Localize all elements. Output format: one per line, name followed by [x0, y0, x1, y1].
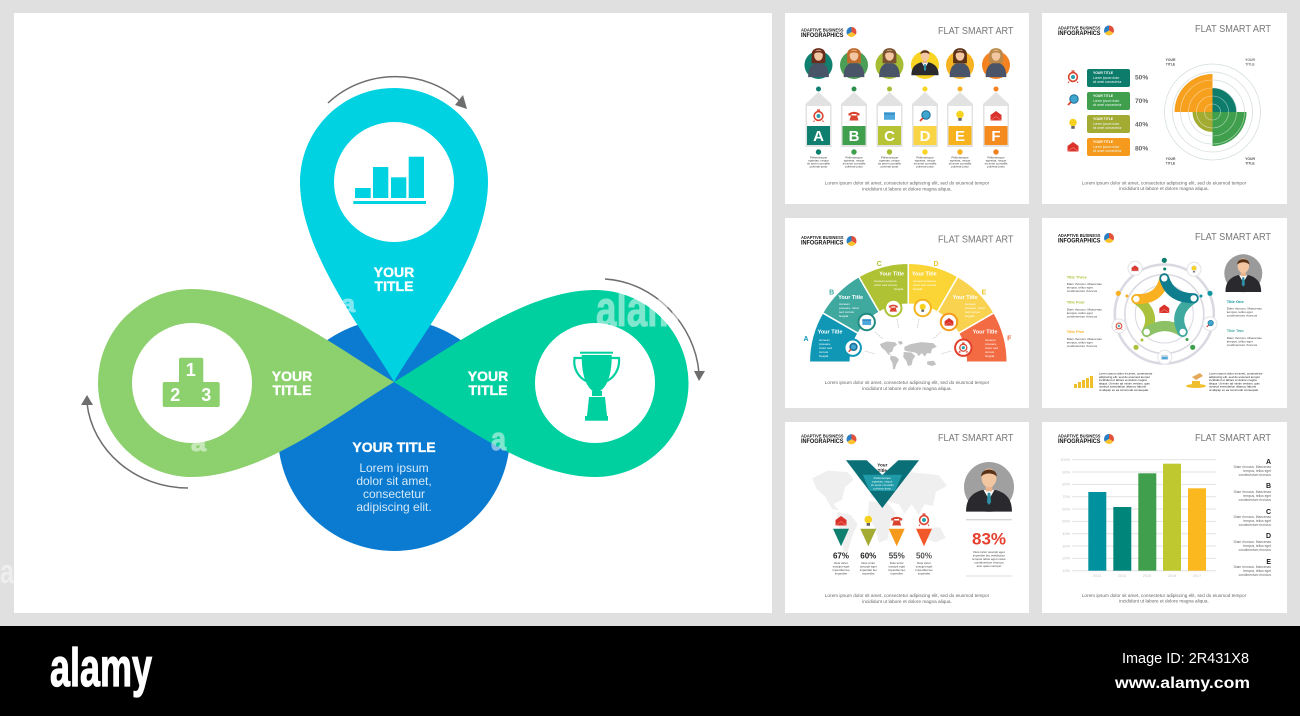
- big V shape: [846, 460, 919, 508]
- bar chart: 2014: [1118, 574, 1126, 578]
- card column B: sit amet convallis: [843, 162, 866, 166]
- logo: [1058, 434, 1114, 445]
- big V shape: pulvinar justo: [873, 486, 891, 490]
- image id: Image ID: 2R431X8: [1122, 650, 1249, 667]
- label: blue body text: Lorem ipsum: [359, 461, 429, 475]
- left labels: condimentum rhoncus: [1067, 314, 1098, 318]
- heading: FLAT SMART ART: [938, 234, 1014, 246]
- left labels: Title Three: [1067, 274, 1088, 280]
- segment body text: posuere, tortor: [965, 306, 985, 310]
- segment body text: [819, 279, 998, 358]
- bottom text right: aliqua. Ut enim ad minim veniam, quis: [1209, 381, 1260, 385]
- bar chart: 90%: [1062, 470, 1071, 474]
- segment body text: tortor sed: [985, 346, 998, 350]
- stat block: sem quam semper: [977, 564, 1001, 568]
- world map: [812, 469, 947, 552]
- bottom text right: ut aliquip ex ea commodo consequat.: [1209, 388, 1259, 392]
- left labels: Title Four: [1067, 300, 1085, 304]
- caption: incididunt ut labore et dolore magna aliqua.: [1119, 186, 1209, 191]
- bottom text left: Lorem ipsum dolor sit amet, consectetur: [1099, 372, 1152, 376]
- polar area chart: TITLE: [1166, 162, 1176, 166]
- bottom text right: adipiscing elit, sed do eiusmod tempor: [1209, 375, 1260, 379]
- side legend: tempus, tellus eget: [1243, 544, 1271, 548]
- bottom text right: Lorem ipsum dolor sit amet, consectetur: [1209, 372, 1262, 376]
- icon badges: [844, 300, 972, 356]
- segment body text: Aenean: [839, 302, 850, 306]
- alamy logo: alamy: [50, 638, 152, 698]
- side legend: Diam rhoncus. Maecenas: [1234, 515, 1271, 519]
- list rows: sit amet consectetur: [1093, 126, 1122, 130]
- logo: [801, 235, 856, 246]
- percentage columns: imperdiet leo: [915, 568, 933, 572]
- side legend: [1234, 459, 1271, 577]
- card column D: D: [920, 128, 931, 145]
- bar chart: 2015: [1143, 574, 1151, 578]
- card column B: [840, 48, 868, 168]
- world map: [880, 341, 937, 369]
- side legend: Diam rhoncus. Maecenas: [1234, 540, 1271, 544]
- bottom text left: nostrud exercitation ullamco laboris: [1099, 385, 1147, 389]
- right labels: condimentum rhoncus: [1227, 343, 1258, 347]
- card column C: Pellentesque: [881, 156, 898, 160]
- logo: INFOGRAPHICS: [1058, 238, 1100, 244]
- segment body text: feugiat: [965, 314, 974, 318]
- big V shape: sit amet convallis: [871, 483, 894, 487]
- big V shape: Your: [877, 462, 887, 468]
- side legend: condimentum rhoncus: [1239, 573, 1271, 577]
- arrow: left: [81, 395, 188, 488]
- portrait: [964, 462, 1014, 512]
- card column D: pulvinar justo: [916, 164, 934, 168]
- label: green title: TITLE: [273, 382, 311, 398]
- arrow: top: [328, 77, 467, 109]
- stat block: 83%: [972, 530, 1006, 548]
- segment letters: C: [877, 261, 882, 268]
- label: blue body text: dolor sit amet,: [356, 474, 432, 488]
- percentage columns: imperdiet leo: [860, 568, 877, 572]
- caption: Lorem ipsum dolor sit amet, consectetur adipiscing elit, sed do eiusmod tempor: [825, 593, 989, 598]
- segment titles: [818, 272, 997, 336]
- card column A: A: [813, 128, 824, 145]
- card column A: [804, 48, 832, 168]
- heading: FLAT SMART ART: [1195, 232, 1271, 243]
- caption: Lorem ipsum dolor sit amet, consectetur adipiscing elit, sed do eiusmod tempor: [825, 380, 989, 385]
- list rows: Lorem ipsum dolor: [1093, 99, 1119, 103]
- watermark fragments: a: [191, 430, 207, 457]
- card column E: Pellentesque: [951, 156, 969, 160]
- card column B: B: [849, 128, 860, 145]
- bar chart: 2013: [1093, 574, 1101, 578]
- caption: incididunt ut labore et dolore magna aliqua.: [862, 186, 952, 192]
- card column D: sit amet convallis: [914, 162, 937, 166]
- caption: Lorem ipsum dolor sit amet, consectetur adipiscing elit, sed do eiusmod tempor: [1082, 593, 1246, 598]
- icon: growth chart: [1074, 376, 1093, 388]
- label: blue body text: adipiscing elit.: [356, 500, 432, 514]
- segment body text: feugiat: [839, 314, 848, 318]
- bar chart: 60%: [1062, 507, 1071, 511]
- arrow: right: [605, 279, 705, 381]
- label: teal title: TITLE: [469, 382, 507, 398]
- segment body text: posuere, tortor: [839, 306, 859, 310]
- list rows: 70%: [1135, 98, 1148, 105]
- percentage columns: suscipit eget: [916, 564, 932, 568]
- card column B: egestas, neque: [844, 158, 865, 162]
- right labels: [1227, 299, 1262, 347]
- left labels: condimentum rhoncus: [1067, 344, 1098, 348]
- segment titles: Your Title: [912, 272, 937, 278]
- side legend: tempus, tellus eget: [1243, 519, 1271, 523]
- logo: INFOGRAPHICS: [1058, 439, 1100, 445]
- bar chart: 20%: [1062, 557, 1071, 561]
- logo: [801, 434, 856, 445]
- right labels: tempus, tellus eget: [1227, 340, 1253, 344]
- label: teal title: YOUR: [468, 368, 508, 384]
- star nodes: [1133, 275, 1197, 335]
- percentage columns: suscipit eget: [860, 564, 877, 568]
- card column D: Pellentesque: [916, 156, 934, 160]
- card column E: egestas, neque: [950, 158, 971, 162]
- label: green title: YOUR: [272, 368, 312, 384]
- blue circle: [278, 319, 510, 551]
- polar area chart: [1164, 58, 1260, 166]
- heading: FLAT SMART ART: [938, 433, 1014, 444]
- card column F: Pellentesque: [987, 156, 1005, 160]
- side legend: Diam rhoncus. Maecenas: [1234, 565, 1271, 569]
- bottom text left: aliqua. Ut enim ad minim veniam, quis: [1099, 381, 1150, 385]
- watermark fragments: alam: [596, 281, 680, 337]
- bar chart: 10%: [1062, 569, 1071, 573]
- bar chart: 2016: [1168, 574, 1176, 578]
- side legend: Diam rhoncus. Maecenas: [1234, 490, 1271, 494]
- segment body text: tortor sed cursus: [913, 283, 936, 287]
- segment body text: feugiat: [985, 354, 994, 358]
- segment letters: E: [982, 290, 987, 296]
- list rows: YOUR TITLE: [1093, 117, 1114, 121]
- segment body text: posuere,: [819, 342, 831, 346]
- segment body text: posuere,: [985, 342, 997, 346]
- big V shape: Title: [878, 468, 887, 473]
- side legend: D: [1266, 533, 1271, 540]
- segment body text: tortor sed: [819, 346, 832, 350]
- segment body text: cursus: [819, 350, 829, 354]
- polar area chart: TITLE: [1166, 62, 1176, 66]
- card column C: C: [884, 128, 895, 145]
- segment titles: Your Title: [838, 295, 863, 301]
- watermark fragments: a: [341, 291, 356, 318]
- left labels: tempus, tellus eget: [1067, 340, 1093, 344]
- side legend: Diam rhoncus. Maecenas: [1234, 465, 1271, 469]
- label: blue body text: consectetur: [363, 487, 425, 501]
- panel: bar chart: [1042, 422, 1287, 613]
- bar chart: 100%: [1060, 458, 1071, 462]
- bar chart: 30%: [1062, 544, 1071, 548]
- polar area chart: TITLE: [1245, 62, 1255, 66]
- segment body text: feugiat: [894, 287, 903, 291]
- stat block: condimentum rhoncus: [974, 560, 1004, 564]
- connector lines: [865, 319, 951, 354]
- bottom text right: incididunt ut labore et dolore magna: [1209, 378, 1257, 382]
- bottom text left: adipiscing elit, sed do eiusmod tempor: [1099, 375, 1150, 379]
- card column A: Pellentesque: [810, 156, 827, 160]
- logo: INFOGRAPHICS: [801, 240, 844, 246]
- segment titles: Your Title: [973, 330, 997, 336]
- list rows: sit amet consectetur: [1093, 149, 1122, 153]
- bottom text left: ut aliquip ex ea commodo consequat.: [1099, 388, 1149, 392]
- card column F: sit amet convallis: [985, 162, 1008, 166]
- bar chart: 2017: [1193, 574, 1201, 578]
- side legend: tempus, tellus eget: [1243, 494, 1271, 498]
- stat block: imperdiet leo vestibulum: [973, 554, 1006, 558]
- card column E: E: [955, 128, 965, 145]
- left labels: Diam rhoncus. Maecenas: [1067, 282, 1102, 286]
- green pin: [98, 289, 394, 477]
- heading: FLAT SMART ART: [1195, 24, 1271, 35]
- segment body text: tortor sed cursus: [874, 283, 897, 287]
- logo: ADAPTIVE BUSINESS: [801, 28, 844, 32]
- side legend: C: [1266, 509, 1271, 516]
- segment body text: Aenean: [819, 338, 830, 342]
- website: www.alamy.com: [1114, 675, 1250, 692]
- percentage columns: imperdiet leo: [888, 568, 906, 572]
- segment letters: D: [933, 261, 939, 268]
- icon: podium: 3: [201, 385, 211, 405]
- segment titles: Your Title: [818, 330, 842, 336]
- caption: incididunt ut labore et dolore magna aliqua.: [862, 599, 952, 604]
- list rows: sit amet consectetur: [1093, 103, 1122, 107]
- segment letters: A: [803, 336, 809, 343]
- bar chart: [1060, 458, 1216, 578]
- bottom text left: incididunt ut labore et dolore magna: [1099, 378, 1147, 382]
- side legend: condimentum rhoncus: [1239, 498, 1271, 502]
- caption: incididunt ut labore et dolore magna aliqua.: [1119, 598, 1209, 604]
- segment letters: F: [1007, 336, 1012, 342]
- card column C: pulvinar justo: [881, 164, 899, 168]
- heading: FLAT SMART ART: [1195, 433, 1271, 444]
- list rows: 40%: [1135, 122, 1148, 128]
- left labels: condimentum rhoncus: [1067, 289, 1098, 293]
- side legend: E: [1266, 559, 1271, 566]
- side legend: condimentum rhoncus: [1239, 473, 1271, 477]
- watermark fragment: margin: a: [0, 553, 15, 591]
- logo: INFOGRAPHICS: [801, 33, 844, 39]
- polar area chart: YOUR: [1166, 157, 1175, 161]
- icon: trophy: [574, 352, 619, 421]
- percentage columns: 67%: [833, 552, 849, 560]
- card column A: egestas, neque: [808, 158, 829, 162]
- percentage columns: 60%: [860, 552, 876, 560]
- right labels: tempus, tellus eget: [1227, 310, 1253, 314]
- card column A: pulvinar justo: [810, 164, 828, 168]
- center icon: [1159, 304, 1169, 313]
- stat block: tempus tellus eget metus: [972, 557, 1006, 561]
- percentage columns: suscipit eget: [888, 564, 905, 568]
- card column F: pulvinar justo: [987, 164, 1005, 168]
- segment body text: Aenean posuere,: [913, 279, 937, 283]
- card column A: sit amet convallis: [807, 162, 830, 166]
- panel: polar chart: [1042, 13, 1287, 204]
- card column C: sit amet convallis: [878, 162, 901, 166]
- right labels: Diam rhoncus. Maecenas: [1227, 336, 1262, 340]
- stat block: Duis tortor suscipit eget: [973, 550, 1005, 554]
- panel: star cycle: [1042, 218, 1287, 408]
- logo: ADAPTIVE BUSINESS: [801, 235, 844, 240]
- segment titles: Your Title: [879, 272, 904, 278]
- icon: bar chart: [353, 157, 426, 204]
- list rows: YOUR TITLE: [1093, 140, 1114, 144]
- card column F: F: [991, 128, 1001, 145]
- panel: map and percentages: [785, 422, 1029, 613]
- left labels: [1067, 274, 1102, 348]
- percentage columns: [832, 513, 933, 576]
- card column E: pulvinar justo: [951, 164, 969, 168]
- panel: semicircle: [785, 218, 1029, 408]
- percentage columns: Duis tortor: [834, 561, 848, 565]
- panel: team cards: [785, 13, 1029, 204]
- segment body text: Aenean: [985, 338, 996, 342]
- logo: INFOGRAPHICS: [1058, 31, 1100, 37]
- bar chart: 70%: [1062, 495, 1071, 499]
- icon: podium: 1: [186, 360, 196, 380]
- list rows: [1068, 69, 1148, 156]
- list rows: 80%: [1135, 146, 1148, 152]
- segment letters: B: [829, 290, 834, 296]
- label: cyan title: TITLE: [375, 278, 413, 294]
- percentage columns: imperdiet: [891, 572, 903, 576]
- side legend: tempus, tellus eget: [1243, 469, 1271, 473]
- left labels: Diam rhoncus. Maecenas: [1067, 308, 1102, 312]
- segment body text: Aenean: [965, 302, 976, 306]
- list rows: YOUR TITLE: [1093, 71, 1114, 75]
- card column D: egestas, neque: [915, 158, 936, 162]
- label: blue title: YOUR TITLE: [352, 439, 436, 455]
- card column D: [911, 50, 939, 168]
- percentage columns: Duis tortor: [890, 561, 904, 565]
- right labels: condimentum rhoncus: [1227, 314, 1258, 318]
- segment body text: feugiat: [913, 287, 922, 291]
- logo: ADAPTIVE BUSINESS: [1058, 434, 1100, 438]
- list rows: Lorem ipsum dolor: [1093, 76, 1119, 80]
- logo: [1058, 26, 1114, 37]
- logo: INFOGRAPHICS: [801, 439, 844, 445]
- logo: ADAPTIVE BUSINESS: [801, 434, 844, 438]
- segment titles: Your Title: [953, 295, 977, 301]
- cyan pin: [300, 88, 488, 382]
- percentage columns: suscipit eget: [833, 564, 849, 568]
- polar area chart: YOUR: [1166, 58, 1175, 62]
- list rows: sit amet consectetur: [1093, 80, 1122, 84]
- stat block: [966, 520, 1012, 576]
- hex icons: [1112, 261, 1217, 364]
- ring dots: [1116, 258, 1213, 350]
- card column E: sit amet convallis: [949, 162, 972, 166]
- segment body text: sed cursus: [839, 310, 854, 314]
- watermark fragments: a: [491, 421, 506, 457]
- logo: [1058, 233, 1114, 244]
- card column F: [982, 48, 1010, 168]
- big V shape: egestas, neque: [872, 480, 893, 484]
- card column B: pulvinar justo: [845, 164, 863, 168]
- percentage columns: Duis tortor: [917, 561, 931, 565]
- bar chart: 80%: [1062, 483, 1071, 487]
- icon: podium: 2: [170, 385, 180, 405]
- side legend: A: [1266, 459, 1271, 466]
- bottom text right: nostrud exercitation ullamco laboris: [1209, 385, 1257, 389]
- polar area chart: YOUR: [1245, 157, 1255, 161]
- logo: ADAPTIVE BUSINESS: [1058, 233, 1100, 238]
- percentage columns: 50%: [916, 552, 932, 560]
- polar area chart: YOUR: [1245, 58, 1255, 62]
- list rows: YOUR TITLE: [1093, 94, 1114, 98]
- left labels: Diam rhoncus. Maecenas: [1067, 337, 1102, 341]
- list rows: Lorem ipsum dolor: [1093, 122, 1119, 126]
- card column C: [876, 48, 904, 168]
- percentage columns: 55%: [889, 552, 905, 560]
- panel: main diagram: [14, 13, 772, 613]
- segment letters: [803, 261, 1012, 343]
- side legend: condimentum rhoncus: [1239, 523, 1271, 527]
- footer bar: [0, 626, 1300, 716]
- side legend: B: [1266, 483, 1271, 490]
- label: cyan title: YOUR: [374, 264, 414, 280]
- segment body text: cursus: [985, 350, 995, 354]
- caption: Lorem ipsum dolor sit amet, consectetur adipiscing elit, sed do eiusmod tempor: [1082, 180, 1246, 186]
- concentric rings: [1115, 264, 1214, 364]
- card column E: [946, 48, 974, 168]
- teal pin: [394, 290, 688, 477]
- semicircle segments: [809, 263, 1007, 362]
- percentage columns: Duis tortor: [861, 561, 875, 565]
- icon: coins and hammer: [1186, 373, 1206, 388]
- right labels: Title Two: [1227, 328, 1244, 333]
- card column C: egestas, neque: [879, 158, 900, 162]
- icon: podium: [163, 358, 220, 407]
- logo: [801, 27, 856, 39]
- bar chart: 40%: [1062, 532, 1071, 536]
- bar chart: 50%: [1062, 520, 1071, 524]
- segment body text: feugiat: [819, 354, 828, 358]
- left labels: Title Five: [1067, 329, 1085, 334]
- percentage columns: imperdiet: [918, 572, 930, 576]
- right labels: Diam rhoncus. Maecenas: [1227, 306, 1262, 310]
- star lobes: [1136, 278, 1194, 332]
- list rows: Lorem ipsum dolor: [1093, 145, 1119, 149]
- card column B: Pellentesque: [845, 156, 863, 160]
- big V shape: Pellentesque: [874, 476, 891, 480]
- left labels: tempus, tellus eget: [1067, 286, 1093, 290]
- right labels: Title One: [1227, 299, 1245, 304]
- polar area chart: TITLE: [1245, 162, 1255, 166]
- list rows: 50%: [1135, 74, 1148, 82]
- left labels: tempus, tellus eget: [1067, 311, 1093, 315]
- heading: FLAT SMART ART: [938, 26, 1014, 37]
- segment body text: Aenean posuere,: [874, 279, 898, 283]
- segment body text: sed cursus: [965, 310, 980, 314]
- card column F: egestas, neque: [986, 158, 1007, 162]
- caption: Lorem ipsum dolor sit amet, consectetur adipiscing elit, sed do eiusmod tempor: [825, 180, 989, 186]
- portrait: [1224, 254, 1262, 292]
- percentage columns: imperdiet: [862, 572, 875, 576]
- side legend: tempus, tellus eget: [1243, 569, 1271, 573]
- percentage columns: imperdiet leo: [832, 568, 850, 572]
- caption: incididunt ut labore et dolore magna aliqua.: [862, 386, 952, 391]
- percentage columns: imperdiet: [835, 572, 847, 576]
- logo: ADAPTIVE BUSINESS: [1058, 26, 1100, 30]
- side legend: condimentum rhoncus: [1239, 548, 1271, 552]
- watermark fragments: [191, 281, 680, 457]
